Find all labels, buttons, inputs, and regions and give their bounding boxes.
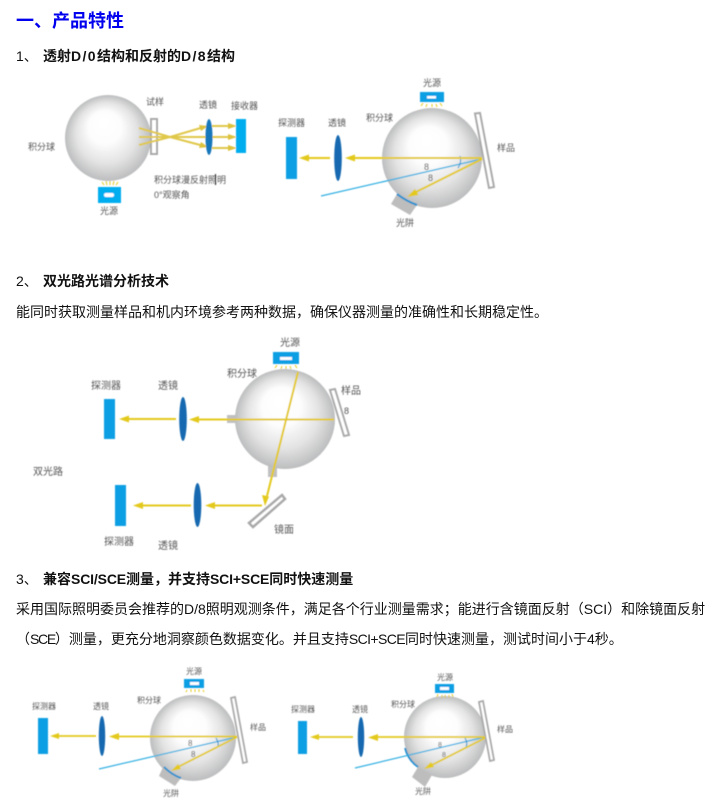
sample: [151, 119, 157, 154]
integrating sphere: [235, 369, 335, 469]
yellow rays: [304, 158, 482, 194]
labels: 透镜: [352, 704, 368, 714]
labels: 积分球: [227, 367, 257, 380]
labels: 试样: [146, 96, 164, 107]
diagram: SCE measurement: [291, 672, 513, 796]
sample: [330, 389, 349, 436]
detectors: [104, 399, 115, 439]
integrating sphere: [382, 108, 482, 208]
labels: 光源: [423, 77, 441, 88]
labels: 探测器: [91, 379, 121, 392]
light trap: [405, 748, 432, 787]
labels: [33, 336, 361, 552]
integrating sphere: [65, 95, 151, 181]
labels: 光源: [437, 672, 453, 682]
arrowheads: [299, 154, 418, 197]
blue ray: [355, 737, 485, 768]
labels: 8: [188, 739, 193, 748]
ray arrowheads: [199, 123, 237, 151]
light source: [184, 679, 204, 692]
light source: [420, 92, 444, 107]
diagram: D/0 transmission structure: [28, 95, 258, 216]
labels: [32, 666, 266, 798]
yellow rays: [124, 372, 334, 506]
labels: 8: [344, 406, 349, 416]
sphere ports: [227, 415, 239, 423]
labels: 光阱: [163, 788, 179, 798]
labels: 0°观察角: [154, 189, 190, 200]
labels: 样品: [341, 384, 361, 397]
lens: [206, 119, 212, 155]
blue ray: [99, 737, 237, 769]
labels: 探测器: [278, 117, 305, 128]
labels: 样品: [497, 142, 515, 153]
light source: [98, 181, 121, 203]
detector: [286, 137, 297, 179]
arrowheads: [50, 733, 181, 771]
labels: 透镜: [199, 99, 217, 110]
labels: [291, 672, 513, 796]
heading: item 3: 3、: [16, 571, 38, 587]
labels: 积分球: [137, 695, 161, 705]
labels: 探测器: [32, 701, 56, 711]
text: item 3 description: 采用国际照明委员会推荐的D/8照明观测条件，满足各个行业测量需求；能进行含镜面反射（SCI）和除镜面反射: [16, 601, 705, 617]
heading: item 3: 兼容SCI/SCE测量，并支持SCI+SCE同时快速测量: [43, 571, 353, 587]
heading: item 1: 透射D/0结构和反射的D/8结构: [43, 48, 235, 64]
labels: 8: [442, 752, 446, 759]
heading: item 2: 双光路光谱分析技术: [43, 273, 169, 289]
light trap: [159, 767, 181, 786]
text: item 3 description: （SCE）测量，更充分地洞察颜色数据变化。并且支持SCI+SCE同时快速测量，测试时间小于4秒。: [16, 631, 623, 647]
text: item 3 description: [16, 601, 705, 647]
labels: 透镜: [158, 539, 178, 552]
diagram: D/8 reflection structure: [278, 77, 515, 228]
lens: [334, 135, 342, 181]
labels: 光阱: [396, 217, 414, 228]
heading: item 2: 2、: [16, 273, 38, 289]
labels: 光源: [100, 205, 118, 216]
light trap: [391, 194, 417, 215]
labels: 光源: [186, 666, 202, 676]
lens: [99, 716, 105, 756]
sample: [475, 113, 494, 188]
labels: 镜面: [274, 523, 294, 536]
labels: 探测器: [291, 704, 315, 714]
labels: 光阱: [415, 786, 431, 796]
labels: 样品: [250, 722, 266, 732]
labels: 接收器: [231, 100, 258, 111]
angle arc: [458, 156, 461, 168]
lens: [358, 717, 364, 757]
labels: 积分球: [391, 699, 415, 709]
sample: [231, 697, 247, 763]
labels: 积分球漫反射照明: [154, 174, 226, 185]
arrowheads: [310, 734, 434, 769]
light source: [435, 684, 454, 698]
light source: [273, 352, 299, 369]
labels: 样品: [497, 724, 513, 734]
labels: 光源: [280, 336, 300, 349]
heading: item 1: 1、: [16, 48, 38, 64]
labels: 透镜: [328, 117, 346, 128]
angle arc: [216, 738, 218, 746]
arrowheads: [119, 416, 269, 509]
detector: [298, 721, 307, 754]
detector: [38, 718, 48, 754]
yellow rays: [315, 737, 485, 767]
yellow rays: [55, 736, 237, 768]
labels: 8: [191, 750, 196, 759]
labels: 探测器: [104, 535, 134, 548]
integrating sphere: [150, 695, 236, 781]
angle arc: [465, 738, 467, 747]
diagram: SCI measurement: [32, 666, 266, 798]
sample: [479, 701, 494, 761]
lenses: [179, 397, 187, 441]
labels: [28, 96, 258, 216]
labels: 8: [438, 742, 442, 749]
cursor bar: [215, 174, 216, 185]
labels: 双光路: [33, 465, 63, 478]
labels: 透镜: [93, 701, 109, 711]
mirror: [249, 495, 285, 527]
title: 一、产品特性: [16, 11, 124, 31]
text: item 2 description: 能同时获取测量样品和机内环境参考两种数据，确保仪器测量的准确性和长期稳定性。: [16, 304, 548, 320]
receiver: [236, 119, 246, 153]
diagram: dual optical path: [33, 336, 361, 552]
labels: 积分球: [28, 141, 55, 152]
blue ray: [321, 159, 482, 196]
light rays: [139, 126, 231, 148]
labels: [278, 77, 515, 228]
integrating sphere: [404, 696, 486, 778]
labels: 8: [424, 162, 429, 172]
labels: 积分球: [366, 112, 393, 123]
labels: 透镜: [158, 379, 178, 392]
labels: 8: [428, 173, 433, 183]
